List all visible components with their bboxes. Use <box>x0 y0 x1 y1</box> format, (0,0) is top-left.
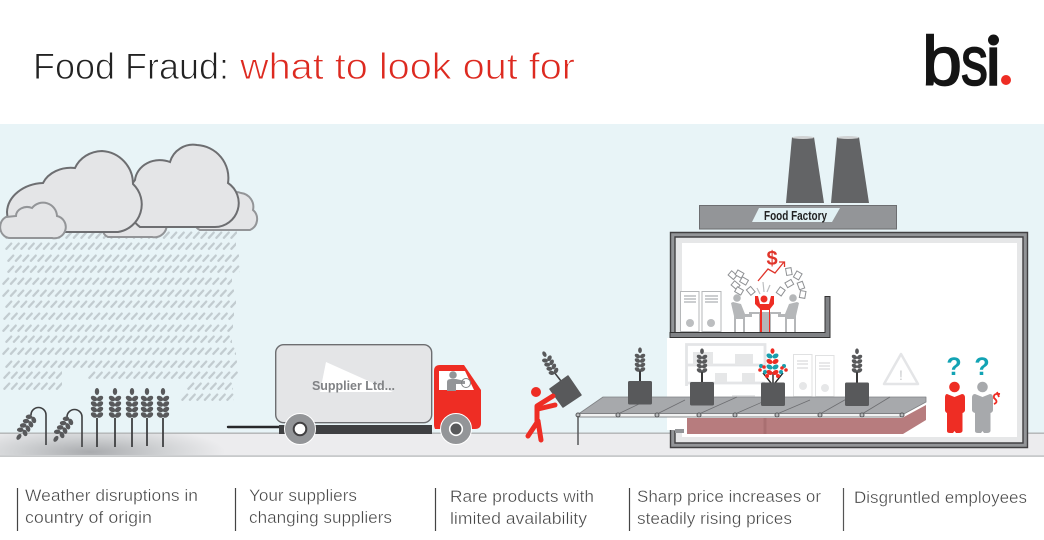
rain <box>2 230 240 402</box>
cloud: small left <box>0 203 66 238</box>
factory chimneys <box>786 136 869 203</box>
office scene <box>680 248 806 332</box>
crate 4 <box>845 348 869 406</box>
flying papers <box>728 268 806 298</box>
slats <box>618 397 890 414</box>
crate <box>550 376 581 407</box>
caption 2 <box>236 487 392 531</box>
cloud: large right <box>128 145 239 227</box>
red figure at table <box>755 296 774 332</box>
crate 1 <box>628 347 652 404</box>
logo: bsi: s <box>961 22 988 100</box>
cloud: large left <box>7 151 142 232</box>
leg <box>577 416 579 445</box>
interior white <box>682 243 1017 437</box>
caption 2: Your suppliers <box>249 487 357 505</box>
belt surface <box>577 397 926 415</box>
tow bar <box>228 426 282 428</box>
factory roof sign <box>700 206 896 229</box>
caption 4 <box>630 488 822 531</box>
caption 1: Weather disruptions in <box>25 487 198 505</box>
caption 3: Rare products with <box>450 488 594 506</box>
factory roof sign: Food Factory <box>764 209 827 223</box>
conveyor belt <box>576 397 926 445</box>
clouds <box>0 145 257 238</box>
lower opening <box>667 338 687 430</box>
supplier label: Supplier Ltd... <box>312 379 395 393</box>
faded warning sign: ! <box>899 367 903 383</box>
caption 5: Disgruntled employees <box>854 489 1027 507</box>
title <box>33 45 575 87</box>
upper floor <box>670 296 830 338</box>
chassis <box>279 425 432 434</box>
faded filing cabinets <box>794 354 834 396</box>
disgruntled employees: ? <box>974 353 990 381</box>
rear wheel <box>284 414 316 444</box>
carried wheat <box>538 349 561 381</box>
employee grey <box>972 382 993 433</box>
red base <box>687 405 926 434</box>
faded back shelf <box>686 344 765 400</box>
crate 2 <box>690 348 714 406</box>
logo: bsi: b <box>922 22 962 100</box>
caption 4: Sharp price increases or <box>637 488 822 506</box>
faded warning sign <box>884 354 918 384</box>
factory building <box>667 232 1028 448</box>
caption 3: limited availability <box>450 510 588 528</box>
logo: bsi: i <box>986 22 1001 100</box>
truck <box>228 345 481 444</box>
cab window <box>439 371 474 390</box>
caption 1 <box>18 487 198 531</box>
cargo highlight <box>320 362 393 392</box>
cab <box>434 365 481 429</box>
filing cabinets <box>680 292 721 332</box>
worker carrying crate <box>528 349 581 440</box>
interior band <box>675 236 1023 444</box>
employee red <box>945 382 965 433</box>
disgruntled employees <box>945 353 1000 433</box>
dollar sign: $ <box>766 248 778 270</box>
cargo box <box>276 345 432 423</box>
bent wheat stalks <box>31 408 82 447</box>
sky background <box>0 124 1044 433</box>
snake <box>994 392 1000 404</box>
caption 2: changing suppliers <box>249 509 392 527</box>
title: what to look out for <box>239 45 575 87</box>
exclamation strokes <box>757 282 770 294</box>
wheat field <box>11 388 170 447</box>
cloud: small right <box>195 192 257 230</box>
upright wheat stalks <box>97 418 163 447</box>
question marks: ? <box>946 353 962 381</box>
caption 1: country of origin <box>25 509 152 527</box>
crate 3: adulterated plant <box>758 348 788 406</box>
caption 3 <box>436 488 594 531</box>
title: Food Fraud: <box>33 45 229 87</box>
rollers <box>576 413 904 417</box>
meeting table and people <box>731 294 799 332</box>
ground <box>0 432 1044 457</box>
cloud: small middle <box>103 195 167 237</box>
driver <box>447 371 470 391</box>
red figure <box>528 387 555 440</box>
crates with wheat on belt <box>628 347 869 406</box>
front wheel <box>440 414 472 444</box>
outer wall <box>672 234 1026 446</box>
rising price arrow <box>758 262 784 281</box>
logo: bsi <box>922 22 1011 100</box>
white rail <box>578 414 902 417</box>
caption 4: steadily rising prices <box>637 510 792 528</box>
captions <box>18 487 1027 531</box>
